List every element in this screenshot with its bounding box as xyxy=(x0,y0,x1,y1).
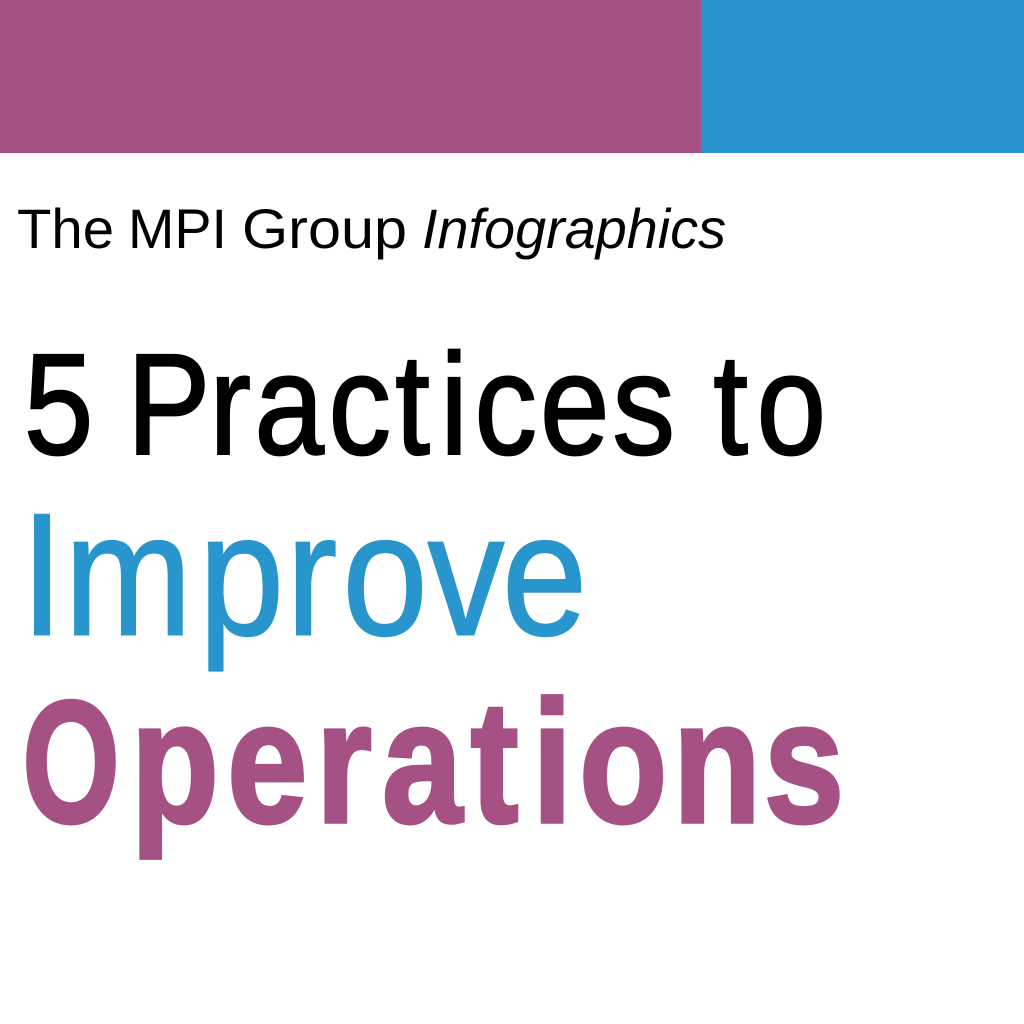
subtitle: Group xyxy=(242,197,407,260)
blue header bar xyxy=(701,0,1024,153)
title line: Improve: Improve xyxy=(21,477,587,672)
title line: Operations: perations xyxy=(131,664,844,859)
subtitle xyxy=(17,197,726,260)
title line: Operations: O xyxy=(22,666,120,860)
subtitle: Infographics xyxy=(422,197,726,260)
subtitle: The xyxy=(17,197,114,260)
subtitle: MPI xyxy=(128,197,227,260)
purple header bar xyxy=(0,0,701,153)
title line: 5 Practices to: 5 Practices to xyxy=(24,324,826,485)
